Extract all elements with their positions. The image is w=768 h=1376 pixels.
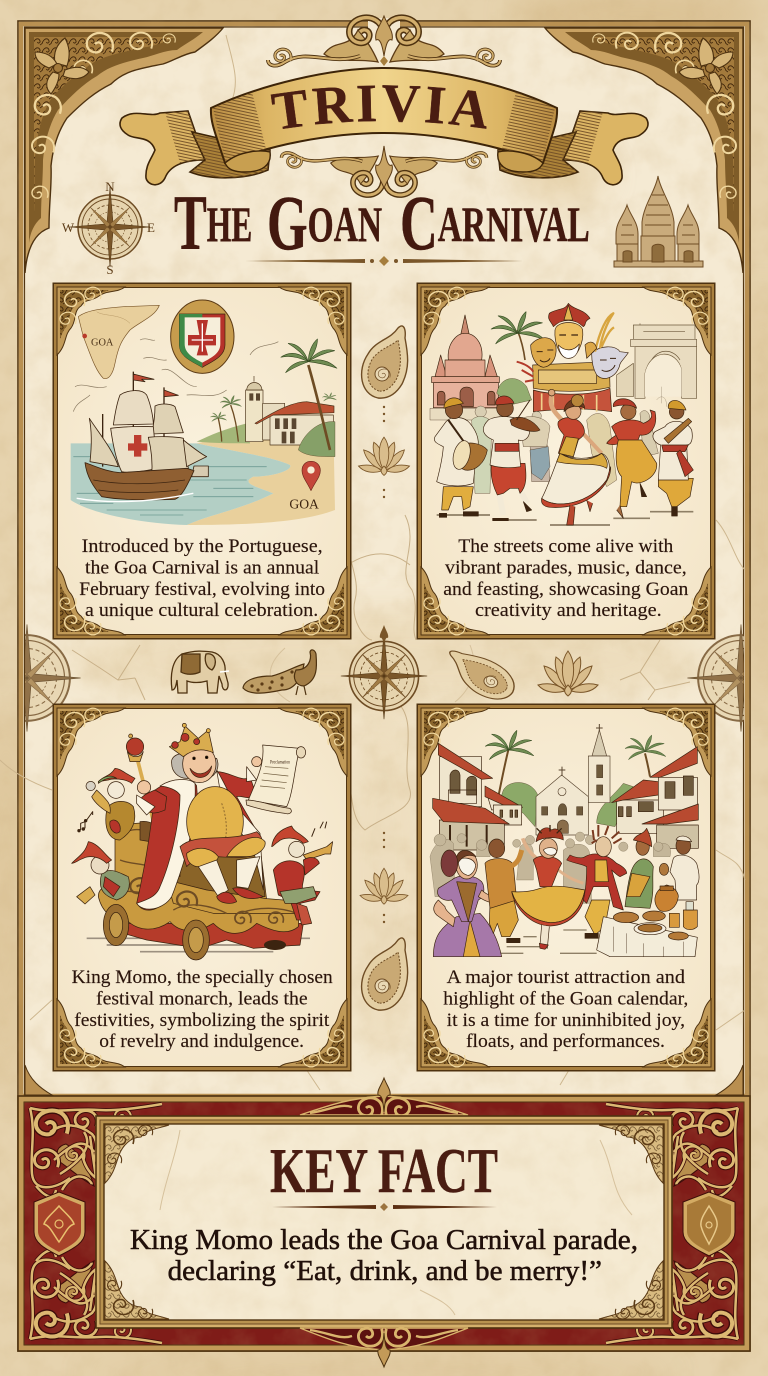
panel 2 text: and feasting, showcasing Goan bbox=[443, 579, 689, 600]
purple lady bbox=[433, 850, 502, 957]
float body bbox=[98, 821, 303, 948]
green woman bbox=[625, 828, 653, 908]
main dancer bbox=[541, 389, 611, 525]
heading: The Goan Carnival: ARNIVAL bbox=[438, 198, 590, 253]
heading: The Goan Carnival: OAN bbox=[308, 198, 382, 253]
icon: lotus lower bbox=[360, 868, 408, 904]
jester upper left bbox=[86, 768, 135, 840]
music notes bbox=[81, 812, 327, 837]
shore scene bbox=[187, 423, 335, 525]
king head bbox=[171, 754, 218, 778]
temple icon bbox=[614, 176, 703, 267]
panel 3 text bbox=[72, 967, 333, 1052]
church bbox=[536, 724, 610, 835]
shield left bbox=[34, 1192, 85, 1256]
panel 3 text: festival monarch, leads the bbox=[96, 988, 308, 1010]
top-left corner ornament bbox=[25, 28, 223, 273]
icon: elephant bbox=[171, 651, 229, 693]
clouds bbox=[73, 339, 278, 412]
panel 1 text: Introduced by the Portuguese, bbox=[82, 536, 323, 557]
mask right bbox=[592, 347, 628, 378]
panel: Portuguese origins bbox=[52, 282, 352, 640]
map of India bbox=[78, 305, 159, 379]
background crowd bbox=[472, 387, 667, 493]
icon: paisley middle row bbox=[440, 648, 520, 704]
second dancer bbox=[607, 399, 657, 518]
banner right tail bbox=[498, 111, 648, 185]
red band bbox=[18, 1096, 750, 1351]
banner main ribbon bbox=[211, 68, 557, 163]
ship bbox=[85, 372, 208, 500]
center compass bbox=[341, 625, 427, 719]
ground shadow bbox=[87, 938, 310, 952]
carnival float with masks bbox=[517, 303, 628, 412]
cook bbox=[659, 836, 699, 900]
left buildings bbox=[433, 743, 523, 850]
heading: The Goan Carnival: G bbox=[267, 181, 308, 267]
panel 4 text bbox=[443, 967, 688, 1052]
panel: King Momo bbox=[52, 704, 352, 1072]
illustration: ship arriving at Goa: GOA bbox=[289, 496, 319, 511]
proclamation scroll bbox=[246, 745, 306, 814]
mask centre bbox=[549, 303, 590, 327]
heading divider bbox=[245, 256, 523, 266]
illustration: parade with musicians and dancers bbox=[430, 303, 697, 525]
panel 2 frame bbox=[416, 282, 716, 640]
panel 1 text: the Goa Carnival is an annual bbox=[85, 558, 319, 578]
cobbles bbox=[500, 930, 597, 953]
key fact divider bbox=[272, 1203, 497, 1211]
heading: The Goan Carnival bbox=[174, 181, 590, 267]
mask left bbox=[531, 338, 556, 367]
panel: street festivities bbox=[416, 282, 716, 640]
center column upper ornaments bbox=[358, 326, 410, 498]
Portuguese crest bbox=[171, 300, 234, 373]
drummer bbox=[434, 398, 487, 517]
center column lower ornaments bbox=[360, 832, 408, 1010]
icon: peacock bbox=[243, 650, 317, 695]
panel 3 frame bbox=[52, 704, 352, 1072]
triumphal arch bbox=[617, 323, 697, 398]
dots lower bbox=[383, 832, 385, 923]
key fact text bbox=[130, 1225, 638, 1287]
ornament under banner bbox=[281, 146, 487, 195]
wheels bbox=[103, 904, 286, 960]
panel 1 text: February festival, evolving into bbox=[79, 579, 325, 600]
yellow trousered man bbox=[485, 839, 522, 943]
key fact text: King Momo leads the Goa Carnival parade, bbox=[130, 1225, 638, 1256]
bottom-right small corner ornament bbox=[716, 1065, 743, 1095]
compass rose top-left: N bbox=[105, 179, 115, 194]
ribbon banner bbox=[119, 67, 649, 186]
illustration: festival square bbox=[430, 724, 699, 957]
panel 3 text: King Momo, the specially chosen bbox=[72, 967, 333, 988]
pink temple bbox=[430, 315, 500, 420]
heading: The Goan Carnival: T bbox=[174, 181, 207, 267]
map of India: GOA bbox=[91, 337, 114, 348]
banner left tail bbox=[120, 111, 270, 185]
icon: paisley lower bbox=[362, 938, 408, 1010]
red band corner scrolls bbox=[30, 1104, 738, 1343]
palm bbox=[517, 330, 525, 360]
heading: The Goan Carnival: HE bbox=[207, 198, 252, 253]
scepter bbox=[126, 734, 160, 847]
panel: tourist attraction bbox=[416, 704, 716, 1072]
compass rose top-left: W bbox=[62, 220, 75, 235]
background crowd bbox=[430, 832, 671, 903]
compass rose top-left: S bbox=[106, 262, 114, 277]
bottom-left small corner ornament bbox=[25, 1065, 52, 1095]
king crown bbox=[169, 726, 213, 757]
panel 4 text: floats, and performances. bbox=[466, 1031, 665, 1052]
shadows bbox=[437, 512, 693, 525]
compass rose top-left: E bbox=[147, 220, 155, 235]
map pin bbox=[302, 461, 320, 491]
icon: lotus upper bbox=[358, 437, 410, 475]
compass rose top-left bbox=[62, 179, 155, 277]
illustration: King Momo on float bbox=[72, 723, 333, 960]
red coat man bbox=[567, 825, 627, 938]
red and yellow dancer bbox=[512, 825, 585, 949]
icon: lotus middle row bbox=[538, 651, 598, 696]
half compass left bbox=[25, 624, 81, 732]
panel 4 text: highlight of the Goan calendar, bbox=[443, 988, 688, 1010]
top-right corner ornament bbox=[545, 28, 743, 273]
green trees bbox=[500, 782, 633, 827]
panel 2 text: creativity and heritage. bbox=[475, 600, 662, 621]
panel: key fact band bbox=[18, 1078, 750, 1367]
bottom crest of band bbox=[300, 1328, 468, 1367]
panel 2 text: The streets come alive with bbox=[458, 536, 674, 557]
panel 1 text bbox=[79, 536, 325, 621]
heading: The Goan Carnival: C bbox=[400, 181, 438, 267]
panel 2 text bbox=[443, 536, 689, 621]
heading: KEY FACT: KEY FACT bbox=[270, 1136, 498, 1206]
right buildings bbox=[612, 747, 698, 848]
panel 2 text: vibrant parades, music, dance, bbox=[445, 558, 687, 578]
green bush bbox=[497, 378, 532, 405]
panel 3 text: festivities, symbolizing the spirit bbox=[74, 1010, 330, 1031]
king legs and shoes bbox=[198, 860, 228, 897]
icon: paisley upper bbox=[362, 326, 408, 398]
violinist bbox=[483, 396, 540, 521]
palm trees bbox=[308, 365, 330, 450]
panel 4 frame bbox=[416, 704, 716, 1072]
palm trees bbox=[498, 750, 650, 797]
top crest ornament bbox=[268, 16, 500, 66]
top crest of band bbox=[300, 1078, 468, 1116]
third musician bbox=[653, 400, 693, 516]
panel 1 frame bbox=[52, 282, 352, 640]
jester right bbox=[272, 826, 333, 925]
food table bbox=[597, 885, 697, 957]
panel 4 text: it is a time for uninhibited joy, bbox=[447, 1010, 685, 1031]
inner cream plaque bbox=[96, 1116, 672, 1328]
jester lower left bbox=[72, 842, 129, 904]
background map lines and cracks bbox=[0, 35, 745, 1090]
panel 3 text: of revelry and indulgence. bbox=[99, 1031, 304, 1052]
king arms bbox=[138, 790, 167, 813]
church and house bbox=[246, 376, 335, 457]
panel 4 text: A major tourist attraction and bbox=[447, 967, 686, 988]
proclamation scroll: Proclamation bbox=[270, 760, 290, 765]
half compass right bbox=[687, 624, 744, 732]
king robe bbox=[137, 781, 200, 910]
key fact text: declaring “Eat, drink, and be merry!” bbox=[168, 1256, 602, 1287]
panel 1 text: a unique cultural celebration. bbox=[85, 600, 318, 621]
illustration: ship arriving at Goa bbox=[71, 300, 337, 525]
dots upper bbox=[383, 406, 385, 498]
shield right bbox=[683, 1192, 735, 1256]
king body bbox=[187, 787, 243, 857]
banner title: TRIVIA: TRIVIA bbox=[270, 85, 487, 129]
